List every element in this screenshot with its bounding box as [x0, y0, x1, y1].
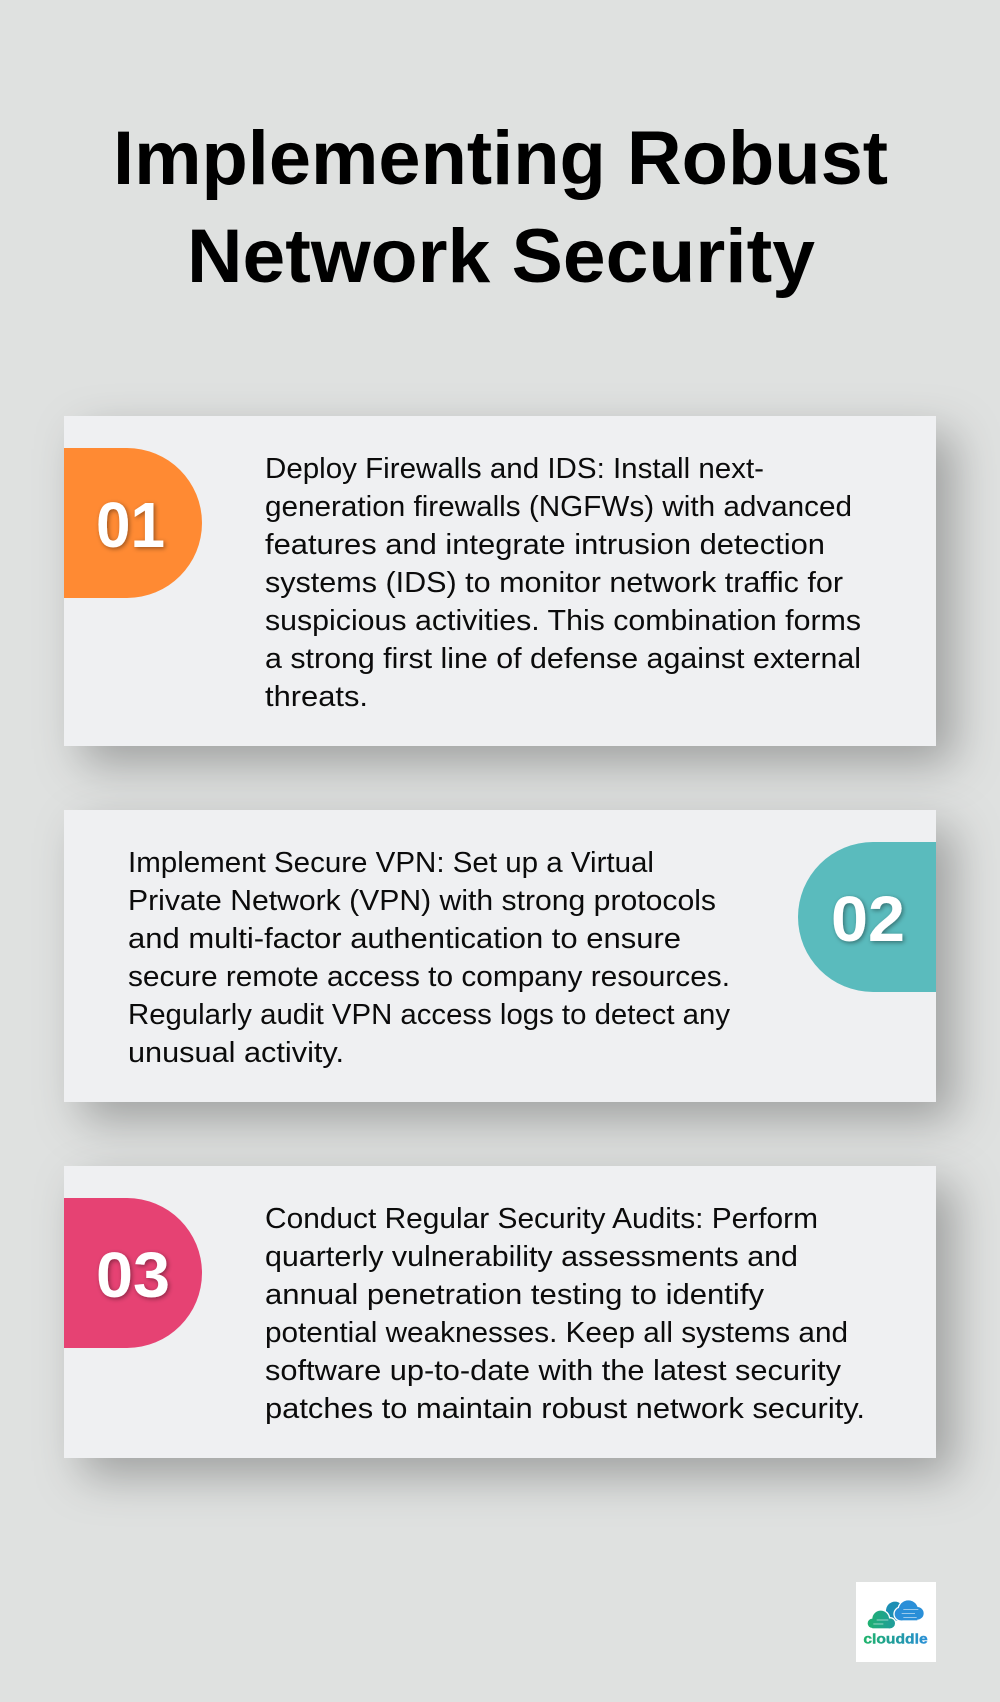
text: step 01 description: features and integrate intrusion detection: [265, 529, 825, 561]
text: step 01 description: systems (IDS) to monitor network traffic for: [265, 567, 844, 599]
text: step 03 description: potential weaknesses. Keep all systems and: [265, 1317, 848, 1349]
number badge 01: 01: [96, 489, 165, 561]
card background 03: [64, 1166, 936, 1458]
number badge 03: 03: [96, 1239, 170, 1311]
panel: step 01: [64, 416, 936, 746]
text: step 01 description: suspicious activities. This combination forms: [265, 605, 861, 637]
text: step 01 description: Deploy Firewalls and IDS: Install next-: [265, 453, 764, 485]
panel: step 02: [64, 810, 936, 1102]
card background 01: [64, 416, 936, 746]
text: step 01 description: [265, 453, 861, 713]
text: step 03 description: quarterly vulnerability assessments and: [265, 1241, 798, 1273]
card background 02: [64, 810, 936, 1102]
text: step 03 description: [265, 1203, 865, 1425]
text: step 02 description: secure remote access to company resources.: [128, 961, 730, 993]
text: step 02 description: unusual activity.: [128, 1037, 344, 1069]
panel: step 03: [64, 1166, 936, 1458]
number badge 03: [64, 1198, 202, 1348]
number badge 01: [64, 448, 202, 598]
text: step 03 description: Conduct Regular Security Audits: Perform: [265, 1203, 818, 1235]
text: step 01 description: generation firewalls (NGFWs) with advanced: [265, 491, 852, 523]
title: Network Security: [187, 214, 815, 299]
text: step 02 description: Regularly audit VPN access logs to detect any: [128, 999, 731, 1031]
text: step 02 description: [128, 847, 731, 1069]
text: step 02 description: Implement Secure VPN: Set up a Virtual: [128, 847, 654, 879]
text: step 03 description: software up-to-date with the latest security: [265, 1355, 842, 1387]
text: step 02 description: and multi-factor authentication to ensure: [128, 923, 681, 955]
title: [113, 116, 888, 299]
number badge 02: 02: [831, 883, 905, 955]
logo: clouddle: [856, 1582, 936, 1662]
text: step 03 description: patches to maintain robust network security.: [265, 1393, 865, 1425]
text: step 02 description: Private Network (VPN) with strong protocols: [128, 885, 716, 917]
icon: clouds: clouddle: [863, 1630, 928, 1646]
text: step 01 description: a strong first line of defense against external: [265, 643, 861, 675]
number badge 02: [798, 842, 936, 992]
text: step 03 description: annual penetration testing to identify: [265, 1279, 765, 1311]
title: Implementing Robust: [113, 116, 888, 201]
text: step 01 description: threats.: [265, 681, 368, 713]
